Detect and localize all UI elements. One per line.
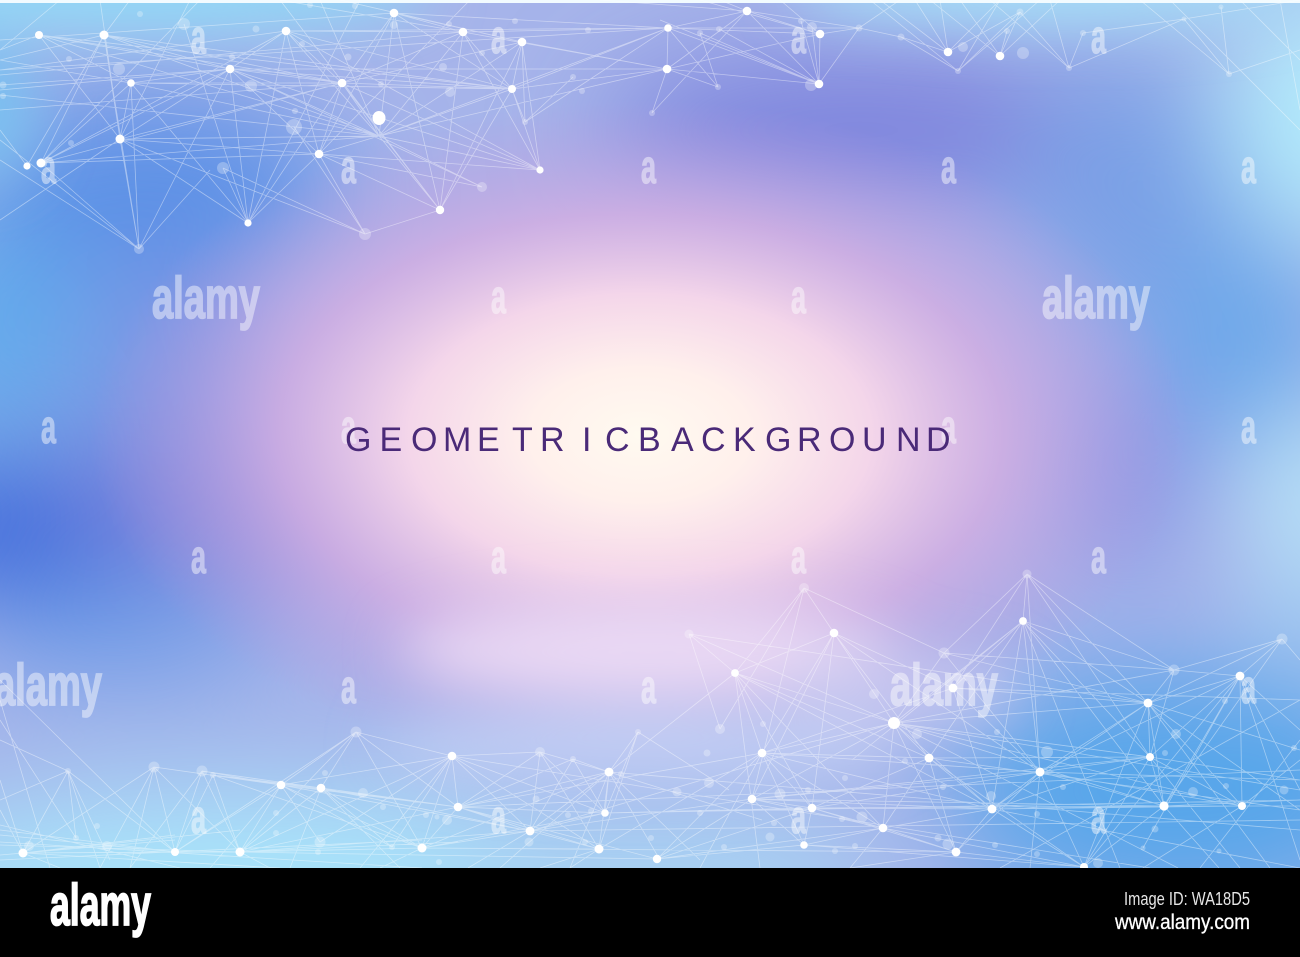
watermark pattern: a [491,790,506,843]
watermark pattern: a [1091,10,1106,63]
top network faint nodes [0,2,1232,254]
top network white nodes [23,7,1004,227]
watermark pattern: a [941,400,956,453]
footer alamy logo: alamy [50,873,151,938]
watermark pattern: a [1241,400,1256,453]
watermark pattern: a [191,790,206,843]
watermark pattern: a [341,400,356,453]
bottom network faint nodes [24,570,1297,868]
watermark pattern: a [791,530,806,583]
watermark pattern: a [791,790,806,843]
watermark pattern: alamy [1042,266,1150,331]
watermark pattern: a [341,140,356,193]
bottom network white nodes [18,617,1246,871]
watermark pattern: a [641,140,656,193]
watermark pattern: a [1091,790,1106,843]
watermark pattern: a [491,270,506,323]
watermark pattern: a [341,660,356,713]
bottom network lines [0,574,1300,868]
top network lines [0,0,1300,249]
watermark pattern: a [791,270,806,323]
title: GEOMETRICBACKGROUND [345,421,951,459]
watermark pattern: alamy [152,266,260,331]
watermark pattern: alamy [890,653,998,718]
bottom network mesh [0,570,1300,871]
watermark pattern: a [641,660,656,713]
watermark pattern: a [41,400,56,453]
footer image id: Image ID: WA18D5 [1124,889,1250,909]
watermark pattern: a [1241,660,1256,713]
footer bar [0,868,1300,957]
watermark pattern: a [941,140,956,193]
watermark pattern: a [1091,530,1106,583]
top network mesh [0,0,1300,254]
watermark pattern: a [191,10,206,63]
watermark pattern: a [491,530,506,583]
watermark pattern: a [191,530,206,583]
watermark pattern: a [791,10,806,63]
footer website: www.alamy.com [1114,911,1250,934]
watermark pattern: a [41,140,56,193]
watermark pattern: a [491,10,506,63]
watermark pattern: a [1241,140,1256,193]
